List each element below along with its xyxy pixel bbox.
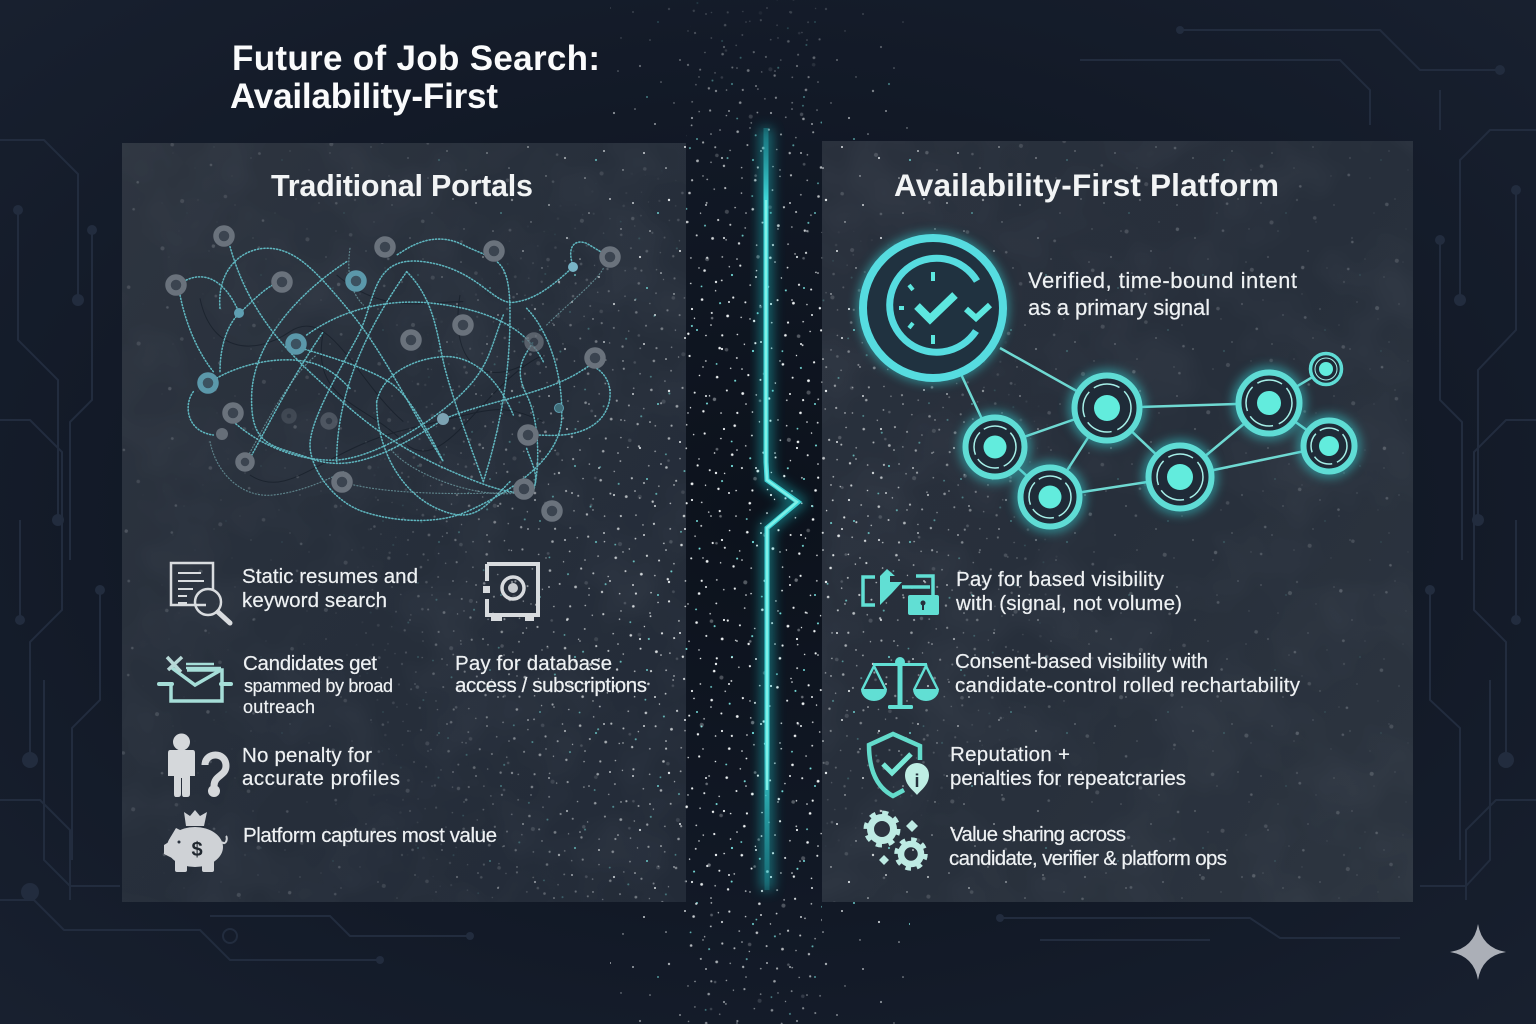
text: value sharing: Value sharing across [950, 823, 1126, 846]
circuit traces: right side [996, 26, 1536, 940]
text: spammed candidates [243, 652, 393, 717]
icon: spam mail [159, 657, 231, 701]
text: static resumes: Static resumes and [242, 565, 418, 588]
heading: traditional portals: Traditional Portals [271, 169, 533, 203]
text: spammed candidates: Candidates get [243, 652, 377, 675]
text: consent-based visibility: candidate-control rolled rechartability [955, 674, 1301, 697]
icon: sparkle watermark [1450, 924, 1506, 980]
text: no penalty: accurate profiles [242, 767, 400, 790]
icon: gears [866, 813, 926, 868]
text: static resumes: keyword search [242, 589, 387, 612]
network links [960, 348, 1329, 497]
text: consent-based visibility [955, 650, 1301, 697]
text: value sharing [949, 823, 1227, 870]
icon: resume with magnifier [171, 563, 230, 623]
icon: shield with info badge: i [914, 771, 920, 791]
icon: verified clock [863, 238, 1003, 378]
text: reputation [950, 743, 1186, 790]
icon: shield with info badge [869, 734, 929, 796]
tangled network diagram [168, 228, 618, 520]
icon: unlock visibility [863, 569, 939, 615]
text: verified intent [1028, 268, 1297, 320]
icon: piggy bank: $ [191, 839, 203, 861]
text: pay for based visibility: Pay for based visibility [956, 568, 1165, 591]
text: no penalty [242, 744, 400, 790]
text: spammed candidates: spammed by broad [244, 676, 393, 696]
network node glow [863, 238, 1355, 527]
title: Availability-First [230, 77, 498, 116]
connected network diagram [863, 238, 1355, 527]
text: pay for database: Pay for database [455, 652, 612, 675]
network nodes [966, 354, 1354, 526]
text: pay for database [455, 652, 647, 697]
text: pay for based visibility [955, 568, 1182, 615]
text: verified intent: as a primary signal [1028, 295, 1210, 320]
text: consent-based visibility: Consent-based visibility with [955, 650, 1208, 673]
text: static resumes [242, 565, 418, 612]
central star field [610, 0, 910, 1024]
text: no penalty: No penalty for [242, 744, 372, 767]
text: reputation: penalties for repeatcraries [950, 767, 1186, 790]
title [230, 39, 600, 116]
network nodes [168, 228, 618, 519]
text: spammed candidates: outreach [243, 697, 315, 717]
circuit traces: left side [0, 140, 474, 964]
text: reputation: Reputation + [950, 743, 1070, 766]
text: platform captures value: Platform captures most value [243, 824, 497, 847]
panel: availability-first platform [822, 141, 1413, 902]
text: verified intent: Verified, time-bound intent [1028, 268, 1297, 293]
text: value sharing: candidate, verifier & platform ops [949, 847, 1227, 870]
icon: safe [483, 564, 538, 621]
heading: availability-first platform: Availability-First Platform [894, 167, 1279, 203]
icon: person with question mark [168, 734, 226, 797]
panel: traditional portals [122, 143, 686, 902]
text: pay for based visibility: with (signal, not volume) [955, 592, 1182, 615]
icon: piggy bank [164, 810, 227, 872]
title: Future of Job Search: [232, 39, 600, 78]
icon: balance scales [861, 657, 939, 709]
text: pay for database: access / subscriptions [455, 674, 647, 697]
central glowing divider [766, 128, 798, 890]
